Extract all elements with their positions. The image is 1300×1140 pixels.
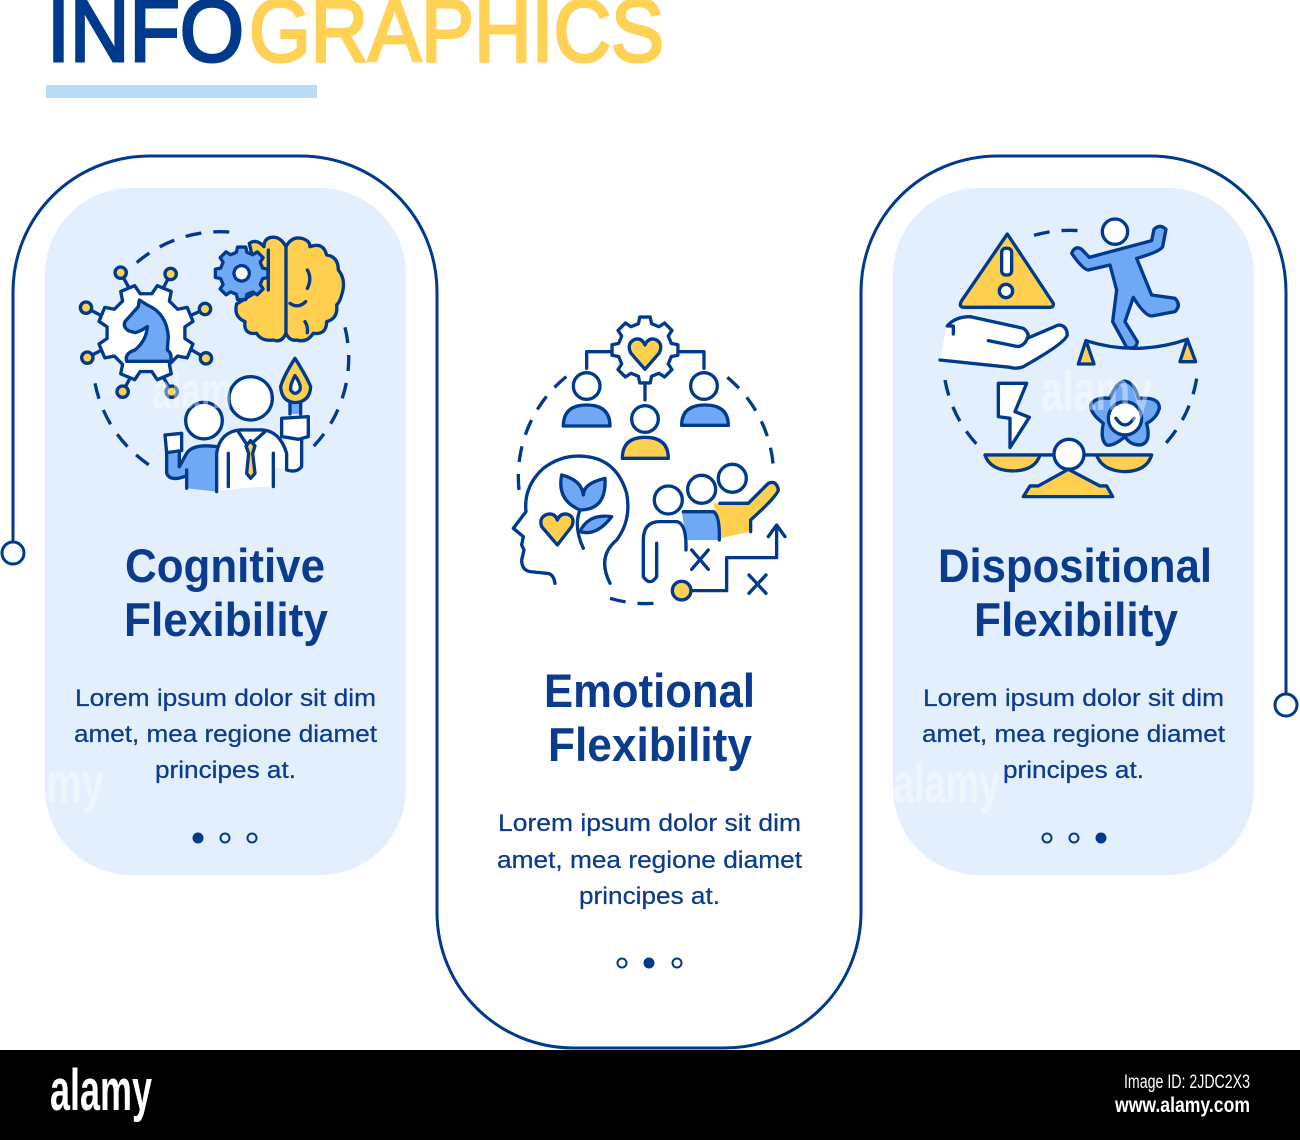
icon: network nodes: [80, 267, 212, 397]
icon: lightning bolt: [998, 383, 1029, 448]
body text: emotional: Lorem ipsum dolor sit dim: [498, 810, 801, 837]
icon: open hand: [940, 317, 1067, 368]
footer website: www.alamy.com: [1114, 1094, 1250, 1117]
icon: brain: [236, 237, 344, 341]
icon: three people: [563, 373, 728, 458]
connector lines: [587, 352, 704, 400]
icon: emotional flexibility illustration: [513, 308, 785, 604]
panel: dispositional flexibility background: [893, 188, 1254, 875]
stock watermarks: my: [46, 751, 104, 814]
body text: cognitive: [74, 685, 377, 784]
heading: Dispositional Flexibility: Flexibility: [974, 593, 1178, 646]
pager dots: third active: [1042, 834, 1106, 842]
icon: gear with chess knight: [99, 286, 193, 380]
icon: balance scale: [985, 439, 1152, 497]
body text: cognitive: Lorem ipsum dolor sit dim: [75, 685, 376, 712]
brain folds: [268, 247, 310, 333]
icon: strategy path with arrow: [672, 525, 785, 600]
heading: Cognitive Flexibility: Cognitive: [125, 539, 325, 592]
body text: cognitive: amet, mea regione diamet: [74, 721, 377, 748]
title underline bar: [46, 85, 317, 98]
body text: dispositional: [922, 685, 1225, 784]
pager dots: second active: [618, 958, 682, 968]
stock watermarks: alamy: [1041, 359, 1152, 422]
continuous frame outline: [2, 156, 1297, 1048]
panel: cognitive flexibility background: [45, 188, 406, 875]
stock watermarks: alamy: [893, 751, 1000, 814]
heading: Dispositional Flexibility: [938, 539, 1212, 646]
footer bar: [0, 1050, 1300, 1140]
footer image id: Image ID: 2JDC2X3: [1124, 1072, 1250, 1093]
body text: emotional: principes at.: [579, 883, 720, 910]
title: [47, 0, 664, 80]
icon: smiling star: [1091, 381, 1159, 445]
heading: Cognitive Flexibility: [124, 539, 328, 646]
icon: heart: [629, 339, 661, 369]
body text: emotional: [497, 810, 802, 910]
body text: emotional: amet, mea regione diamet: [497, 847, 802, 874]
dashed circle: [518, 373, 773, 604]
body text: dispositional: Lorem ipsum dolor sit dim: [923, 685, 1224, 712]
heading: Dispositional Flexibility: Dispositional: [938, 539, 1212, 592]
footer logo: alamy: [50, 1058, 152, 1123]
body text: dispositional: amet, mea regione diamet: [922, 721, 1225, 748]
body text: cognitive: principes at.: [155, 757, 296, 784]
icon: warning triangle: [960, 234, 1053, 307]
heading: Emotional Flexibility: Emotional: [544, 664, 755, 717]
icon: balancing figure on rope: [1072, 219, 1196, 364]
dashed circle: [945, 230, 1197, 446]
icon: blue gear: [208, 240, 275, 307]
stock watermarks: alam: [152, 363, 232, 419]
icon: dispositional flexibility illustration: [940, 219, 1197, 497]
icon: heart gear: [603, 308, 687, 392]
heading: Emotional Flexibility: Flexibility: [548, 718, 752, 771]
stock watermarks: [46, 359, 1152, 814]
icon: group of people pointing: [643, 464, 778, 582]
dashed circle: [95, 232, 349, 467]
heading: Emotional Flexibility: [544, 664, 755, 771]
heading: Cognitive Flexibility: Flexibility: [124, 593, 328, 646]
icon: cognitive flexibility illustration: [80, 232, 349, 492]
pager dots: first active: [194, 834, 256, 842]
icon: two people with torch: [165, 358, 311, 492]
body text: dispositional: principes at.: [1003, 757, 1144, 784]
icon: head with plant and heart: [513, 456, 628, 583]
